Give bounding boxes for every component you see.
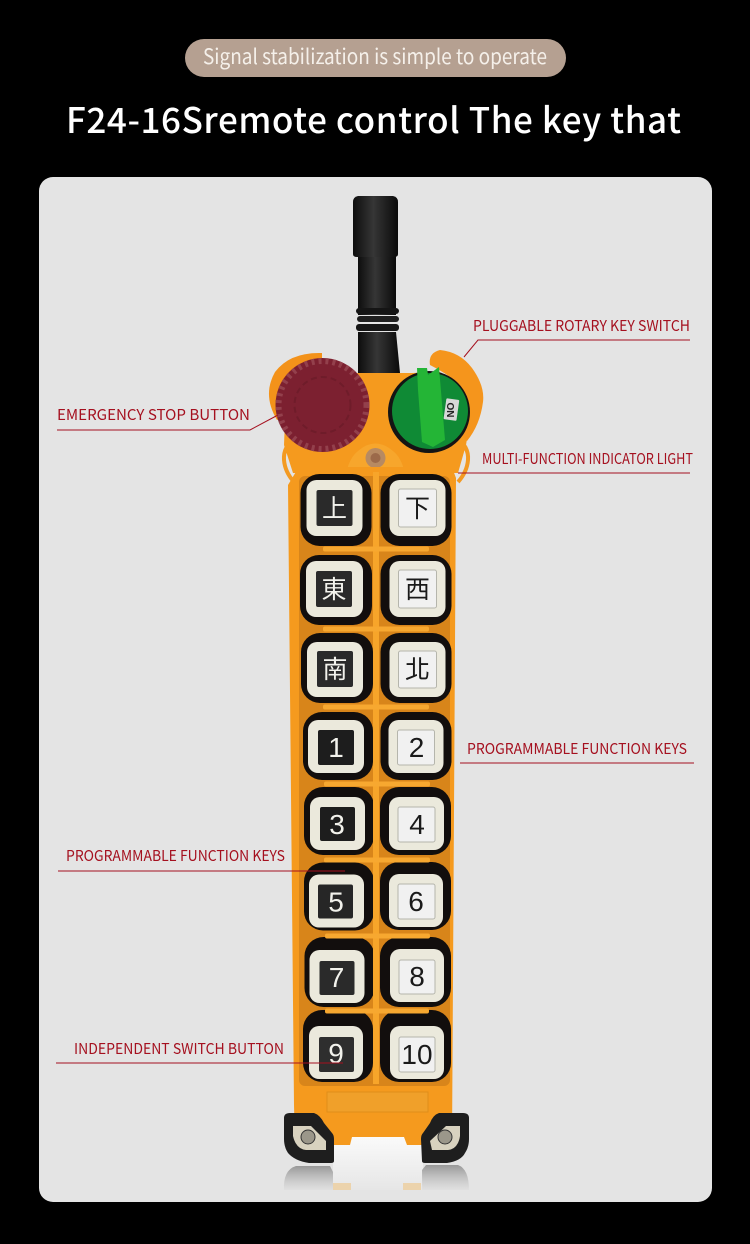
horizontal ribs <box>323 546 430 1014</box>
key up: 上 <box>322 495 347 523</box>
emergency stop button <box>276 358 370 452</box>
key east <box>300 555 372 625</box>
key 2: 2 <box>409 732 424 763</box>
key 3: 3 <box>329 809 345 840</box>
key 7: 7 <box>329 962 344 993</box>
key south: 南 <box>322 656 348 684</box>
callout: programmable function keys right: PROGRAMMABLE FUNCTION KEYS <box>467 738 687 759</box>
key down <box>380 474 452 546</box>
remote control product <box>269 196 483 1190</box>
callout: programmable function keys left: PROGRAMMABLE FUNCTION KEYS <box>66 845 285 866</box>
key 9 <box>303 1010 373 1082</box>
key 2 <box>380 712 452 780</box>
side loops <box>284 438 468 482</box>
key 10: 10 <box>401 1039 433 1070</box>
key 8: 8 <box>409 961 425 992</box>
key up <box>300 474 372 546</box>
orange body main <box>288 467 456 1145</box>
key 3 <box>304 787 374 855</box>
callout: pluggable rotary key switch: PLUGGABLE ROTARY KEY SWITCH <box>473 315 690 336</box>
key south <box>301 633 373 703</box>
left foot <box>284 1113 334 1163</box>
rotary key switch <box>388 367 470 453</box>
right foot <box>421 1113 469 1163</box>
key 4 <box>380 787 451 855</box>
centre rib <box>373 472 379 1084</box>
key 8 <box>380 937 451 1007</box>
panel: product background <box>39 177 712 1202</box>
key 4: 4 <box>409 809 425 840</box>
key 1 <box>303 712 373 780</box>
reflection of feet <box>284 1137 469 1190</box>
indicator light mound <box>346 444 405 473</box>
left guard <box>269 353 322 420</box>
title: F24-16Sremote control The key that <box>66 93 681 144</box>
key down: 下 <box>405 495 430 523</box>
key west <box>380 555 452 625</box>
key 6: 6 <box>408 886 424 917</box>
key 6 <box>380 862 451 930</box>
key 9: 9 <box>328 1038 344 1069</box>
key 7 <box>304 937 374 1007</box>
key east: 東 <box>321 576 347 604</box>
callout: emergency stop button: EMERGENCY STOP BUTTON <box>57 404 250 425</box>
lower recess panel <box>327 1092 428 1112</box>
key 5 <box>304 862 374 930</box>
orange body head <box>284 372 470 473</box>
callout: independent switch button: INDEPENDENT SWITCH BUTTON <box>74 1038 284 1059</box>
recessed key bed <box>299 476 450 1086</box>
keys <box>300 474 452 1082</box>
key north <box>380 633 452 703</box>
right guard <box>430 350 483 441</box>
key 1: 1 <box>328 732 344 763</box>
rotary key switch: ON <box>444 402 455 418</box>
key west: 西 <box>405 576 430 604</box>
key north: 北 <box>405 656 430 684</box>
key 5: 5 <box>328 886 344 918</box>
callout: multi-function indicator light: MULTI-FUNCTION INDICATOR LIGHT <box>482 448 693 469</box>
callout: pluggable rotary key switch <box>464 315 690 357</box>
key 10 <box>380 1010 451 1082</box>
antenna <box>353 196 400 373</box>
subtitle pill: Signal stabilization is simple to operate <box>203 41 547 71</box>
